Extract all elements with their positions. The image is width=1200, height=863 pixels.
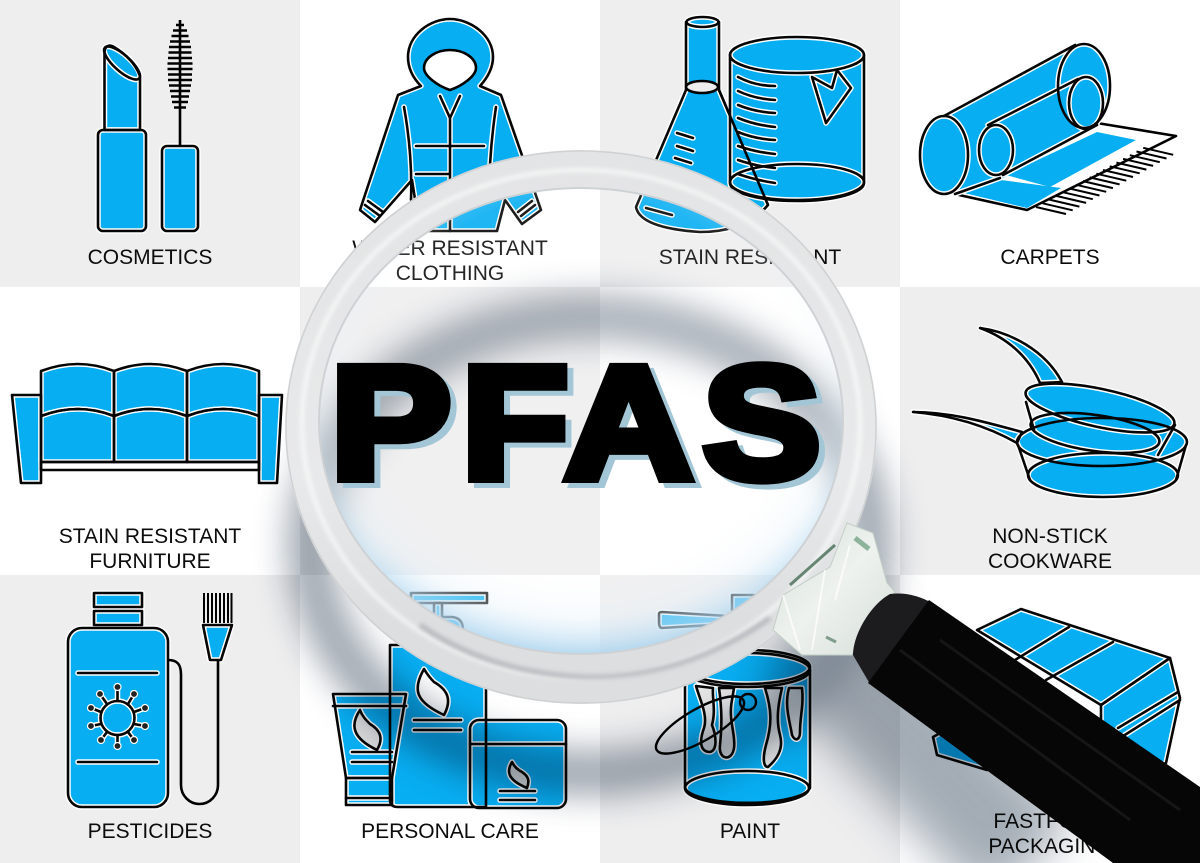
heading: PFAS: A <box>564 333 693 512</box>
label: water resistant clothing: WATER RESISTANT <box>352 237 548 260</box>
label: stain resistant: STAIN RESISTANT <box>659 246 841 269</box>
label: paint: PAINT <box>720 820 780 843</box>
heading: PFAS <box>331 333 820 513</box>
label: fast food packaging: FASTFOOD <box>993 810 1107 833</box>
icon: sofa <box>12 364 282 483</box>
label: carpets: CARPETS <box>1000 246 1100 269</box>
label: stain resistant furniture: FURNITURE <box>89 550 211 573</box>
magnifier lens glass <box>317 188 845 654</box>
label: fast food packaging: PACKAGING <box>988 835 1112 858</box>
label: non-stick cookware: NON-STICK <box>992 525 1108 548</box>
icon: paint bucket <box>649 595 810 805</box>
label: personal care: PERSONAL CARE <box>361 820 539 843</box>
icon: jacket <box>360 19 541 231</box>
icon: lipstick and mascara <box>98 20 198 231</box>
icon: frying pans <box>913 328 1187 497</box>
label: non-stick cookware: COOKWARE <box>988 550 1112 573</box>
magnifier handle <box>853 593 1200 863</box>
label: cosmetics: COSMETICS <box>88 246 212 269</box>
label: water resistant clothing: CLOTHING <box>396 262 504 285</box>
label: stain resistant furniture: STAIN RESISTANT <box>59 525 241 548</box>
heading: PFAS: P <box>331 334 451 513</box>
magnifier glass joint <box>773 523 895 655</box>
icon: flask and beaker <box>636 17 864 232</box>
icon: personal care products <box>333 593 566 808</box>
icon: carpet roll <box>920 44 1176 214</box>
icon: food packaging box <box>933 609 1180 800</box>
heading: PFAS: S <box>703 333 820 512</box>
icon: pesticide sprayer <box>68 593 232 807</box>
magnifier shadow <box>310 317 1030 863</box>
label: pesticides: PESTICIDES <box>88 820 212 843</box>
magnifier ring <box>285 150 877 704</box>
heading: PFAS: F <box>462 335 568 512</box>
